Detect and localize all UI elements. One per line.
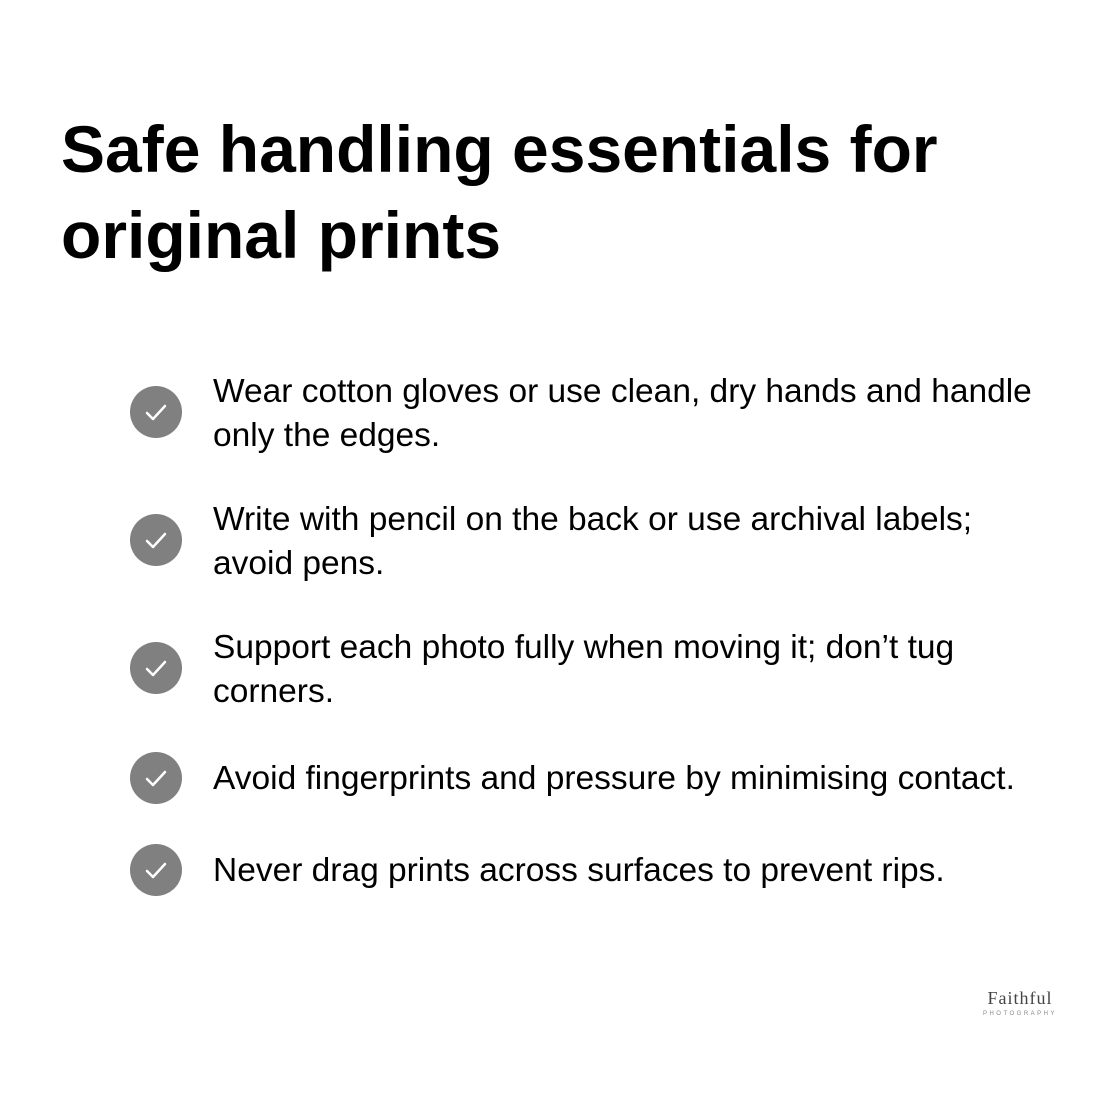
item 3 — [130, 629, 954, 710]
item 2 — [130, 501, 972, 582]
text: Avoid fingerprints and pressure by minimising contact. — [213, 760, 1015, 797]
text: Support each photo fully when moving it; don’t tug — [213, 629, 954, 666]
logo — [983, 988, 1057, 1017]
icon: check — [130, 514, 182, 566]
title — [61, 112, 938, 272]
icon: check — [130, 386, 182, 438]
text: only the edges. — [213, 417, 440, 454]
icon: check — [130, 752, 182, 804]
text: Never drag prints across surfaces to prevent rips. — [213, 852, 945, 889]
text: avoid pens. — [213, 545, 384, 582]
logo: PHOTOGRAPHY — [983, 1011, 1057, 1017]
item 1 — [130, 373, 1032, 454]
title: original prints — [61, 198, 501, 272]
text: Wear cotton gloves or use clean, dry hands and handle — [213, 373, 1032, 410]
icon: check — [130, 642, 182, 694]
text — [213, 373, 1032, 454]
text: corners. — [213, 673, 334, 710]
title: Safe handling essentials for — [61, 112, 938, 186]
logo: Faithful — [988, 988, 1052, 1008]
icon: check — [130, 844, 182, 896]
text: Write with pencil on the back or use archival labels; — [213, 501, 972, 538]
item 5 — [130, 844, 945, 896]
text — [213, 501, 972, 582]
item 4 — [130, 752, 1015, 804]
text — [213, 629, 954, 710]
